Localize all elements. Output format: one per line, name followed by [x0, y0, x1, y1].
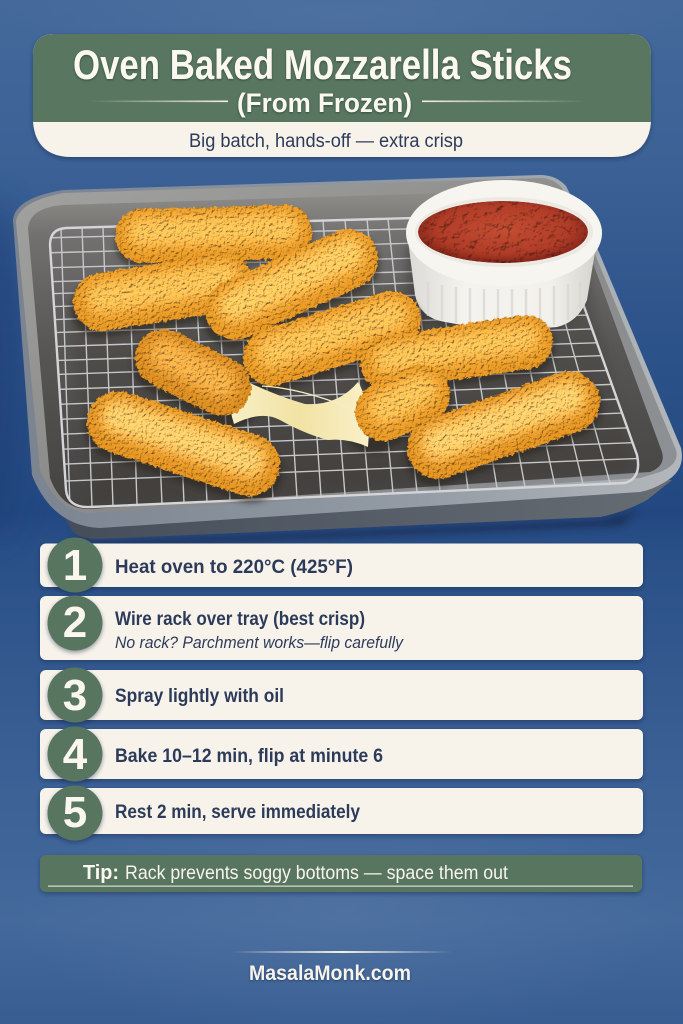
photo: baking tray with mozzarella sticks: [13, 175, 682, 548]
number badge 3: 3: [63, 671, 87, 720]
step 3: [40, 668, 643, 722]
step 2 text: Wire rack over tray (best crisp): [115, 609, 365, 630]
number badge 5: [48, 786, 102, 840]
stick: upper left: [102, 278, 224, 302]
number badge 4: [48, 726, 102, 782]
header panel background: [33, 34, 651, 157]
step 4 text: Bake 10–12 min, flip at minute 6: [115, 746, 383, 767]
step 5: [40, 786, 643, 840]
stick: back: [142, 228, 285, 236]
number badge 3: [48, 668, 102, 722]
panel: title header: [33, 34, 651, 157]
step 2: [40, 596, 643, 660]
cheese pull: [229, 374, 369, 447]
subtitle: from frozen: (From Frozen): [237, 88, 412, 118]
stick: front right: [438, 397, 569, 448]
step 4: [40, 726, 643, 782]
title: Oven Baked Mozzarella Sticks: [73, 41, 572, 88]
tip text: Tip:: [83, 862, 119, 884]
number badge 5: 5: [63, 788, 87, 837]
number badge 1: 1: [63, 541, 87, 590]
number badge 1: [48, 538, 102, 592]
number badge 2: [48, 596, 102, 650]
stick: broken right half: [384, 390, 421, 412]
step 1 text: Heat oven to 220°C (425°F): [115, 557, 353, 578]
number badge 4: 4: [63, 730, 88, 779]
step 1: [40, 538, 643, 592]
tip banner: [40, 855, 642, 892]
stick: broken left half: [164, 354, 222, 387]
stick: front left: [118, 417, 249, 465]
stick: centre: [272, 315, 392, 357]
tip banner: Rack prevents soggy bottoms — space them out: [125, 862, 509, 884]
tray: [13, 175, 682, 539]
tray shadow: [70, 510, 640, 548]
number badge 2: 2: [63, 598, 87, 647]
wire rack: [40, 214, 650, 508]
tagline: Big batch, hands-off — extra crisp: [189, 131, 463, 152]
mozzarella sticks: [100, 228, 571, 472]
website credit: MasalaMonk.com: [249, 962, 411, 985]
step 5 text: Rest 2 min, serve immediately: [115, 802, 360, 823]
stick: centre right: [387, 338, 526, 363]
stick: upper centre: [235, 254, 348, 310]
steps list: [40, 538, 643, 840]
step 3 text: Spray lightly with oil: [115, 686, 284, 707]
step 2 note: No rack? Parchment works—flip carefully: [115, 634, 405, 652]
stick shadows: [100, 237, 571, 472]
ramekin of marinara sauce: [405, 180, 602, 337]
